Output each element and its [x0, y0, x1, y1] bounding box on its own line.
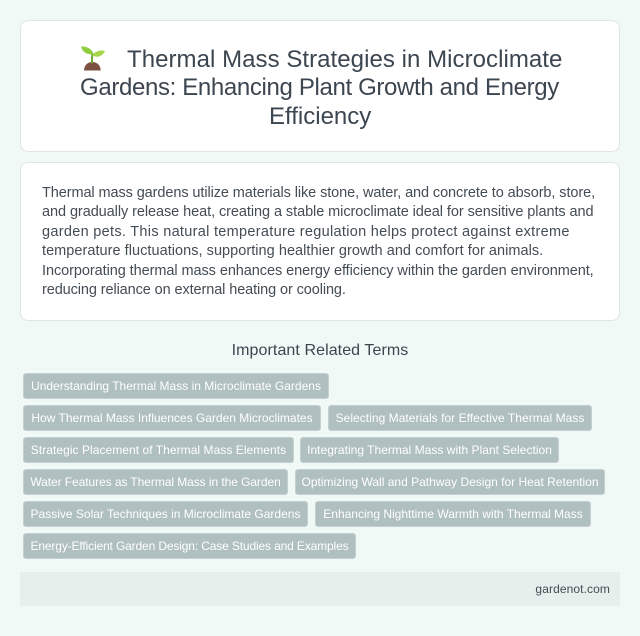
footer bar: [20, 572, 620, 606]
tag: [23, 501, 308, 527]
tag: Energy-Efficient Garden Design: Case Studies and Examples: [30, 539, 348, 553]
tag: Passive Solar Techniques in Microclimate Gardens: [31, 507, 300, 521]
tag: Enhancing Nighttime Warmth with Thermal Mass: [323, 507, 583, 521]
description card: and gradually release heat, creating a stable microclimate ideal for sensitive plants and: [42, 204, 594, 220]
tag: [315, 501, 591, 527]
related terms tags: [23, 373, 605, 559]
description card: Thermal mass gardens utilize materials like stone, water, and concrete to absorb, store,: [42, 185, 595, 201]
title card: [20, 20, 620, 152]
tag: [23, 405, 321, 431]
tag: [23, 437, 294, 463]
tag: Water Features as Thermal Mass in the Garden: [30, 475, 281, 489]
tag: [23, 373, 329, 399]
description card: reducing reliance on external heating or cooling.: [42, 282, 346, 298]
tag: [295, 469, 605, 495]
description card: temperature fluctuations, supporting healthier growth and comfort for animals.: [42, 243, 543, 259]
footer source: gardenot.com: [535, 582, 610, 596]
tag: Integrating Thermal Mass with Plant Selection: [307, 443, 552, 457]
description card: [20, 162, 620, 321]
description card: garden pets. This natural temperature regulation helps protect against extreme: [42, 224, 570, 240]
tag: [23, 469, 288, 495]
title text: [80, 46, 562, 130]
icon: seedling: [81, 46, 105, 70]
title card: Efficiency: [269, 103, 371, 130]
description text: [42, 185, 595, 298]
tag: [328, 405, 592, 431]
tag: [300, 437, 559, 463]
tag: How Thermal Mass Influences Garden Microclimates: [31, 411, 313, 425]
section heading: Important Related Terms: [232, 342, 408, 359]
tag: Understanding Thermal Mass in Microclimate Gardens: [31, 379, 321, 393]
title card: Thermal Mass Strategies in Microclimate: [127, 46, 562, 73]
title card: Gardens: Enhancing Plant Growth and Energy: [80, 74, 559, 101]
tag: [23, 533, 356, 559]
description card: Incorporating thermal mass enhances energy efficiency within the garden environment,: [42, 263, 594, 279]
tag: Strategic Placement of Thermal Mass Elements: [31, 443, 286, 457]
tag: Optimizing Wall and Pathway Design for Heat Retention: [301, 475, 599, 489]
tag: Selecting Materials for Effective Thermal Mass: [336, 411, 584, 425]
